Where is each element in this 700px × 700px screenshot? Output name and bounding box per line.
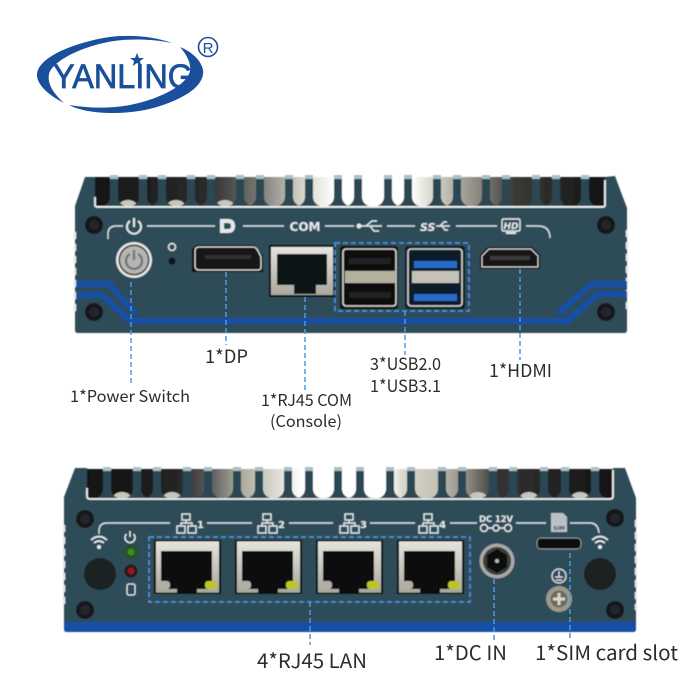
label: DC 12V: DC 12V <box>479 515 513 525</box>
label: HDMI: 1*HDMI <box>489 357 552 383</box>
white edge under fins <box>87 470 613 499</box>
LAN port 3 <box>316 540 383 594</box>
side vents <box>75 230 627 312</box>
icon: SIM: SIM <box>553 526 565 532</box>
logo: Yanling <box>37 36 218 113</box>
label: RJ45 COM console <box>261 387 352 432</box>
label: RJ45 COM console: 1*RJ45 COM <box>261 387 352 411</box>
USB ports dashed box <box>335 243 469 311</box>
label: USB: 1*USB3.1 <box>370 372 441 397</box>
icon: power symbol <box>127 218 141 234</box>
screws <box>85 216 615 321</box>
icon: SIM <box>551 513 567 532</box>
silkscreen lines <box>108 226 550 239</box>
icons: network ports 1-4: 2 <box>278 520 285 531</box>
LAN ports dashed box <box>149 537 470 602</box>
label: USB <box>370 350 441 397</box>
heatsink fins <box>103 175 596 206</box>
heatsink cavity <box>93 177 607 206</box>
label: RJ45 LAN: 4*RJ45 LAN <box>257 645 367 674</box>
label: COM: COM <box>290 220 320 234</box>
label: power switch: 1*Power Switch <box>70 383 190 407</box>
LAN port 1 <box>154 540 221 594</box>
heatsink cavity <box>85 469 615 498</box>
icon: SuperSpeed USB: SS <box>420 221 436 234</box>
icon: USB <box>357 221 382 231</box>
icon: HD <box>502 219 520 234</box>
screws <box>76 509 624 619</box>
antenna plugs <box>84 558 616 590</box>
silkscreen lines <box>99 523 599 534</box>
label: RJ45 COM console: (Console) <box>270 408 342 432</box>
SIM slot <box>537 538 581 549</box>
USB 2.0 port stack <box>340 246 398 309</box>
icons: wifi <box>91 536 608 548</box>
scoop highlights <box>119 200 234 212</box>
dashed leader lines: front <box>131 269 520 392</box>
LED indicators <box>124 531 138 595</box>
HDMI port <box>480 247 540 269</box>
icon: displayport <box>220 219 235 233</box>
icon: HD: HD <box>503 222 519 232</box>
icons: network ports 1-4: 1 <box>197 520 204 531</box>
panel: front device <box>75 175 627 333</box>
label: SIM card slot: 1*SIM card slot <box>535 637 678 666</box>
DP port <box>192 245 263 272</box>
logo: Yanling: YANLING <box>53 58 193 96</box>
DC jack <box>480 544 514 578</box>
panel: rear device <box>64 467 636 632</box>
label: DP: 1*DP <box>205 343 248 369</box>
power button <box>116 242 152 278</box>
icon: ground <box>552 569 566 583</box>
icons: network ports 1-4: 3 <box>360 520 367 531</box>
white edge under fins <box>95 180 605 207</box>
scoop highlights <box>113 492 589 504</box>
ground screw <box>546 586 572 612</box>
label: USB: 3*USB2.0 <box>370 350 441 375</box>
icon: SuperSpeed USB <box>420 221 450 234</box>
status LED <box>168 244 176 264</box>
label: DC 12V <box>479 515 513 532</box>
dashed leader lines: rear <box>310 553 570 645</box>
side vents <box>64 520 636 610</box>
logo: Yanling: R <box>203 40 214 57</box>
LAN port 4 <box>397 540 464 594</box>
blue base strip <box>64 622 636 632</box>
blue stripes <box>76 284 627 321</box>
LAN port 2 <box>235 540 302 594</box>
COM RJ45 port <box>269 245 335 297</box>
icons: network ports 1-4: 4 <box>439 520 446 531</box>
device body <box>75 176 627 333</box>
label: DC IN: 1*DC IN <box>434 637 507 666</box>
USB 3.0 port stack <box>405 246 465 309</box>
heatsink fins <box>96 467 606 498</box>
device body <box>64 468 636 632</box>
icons: network ports 1-4 <box>177 514 446 533</box>
